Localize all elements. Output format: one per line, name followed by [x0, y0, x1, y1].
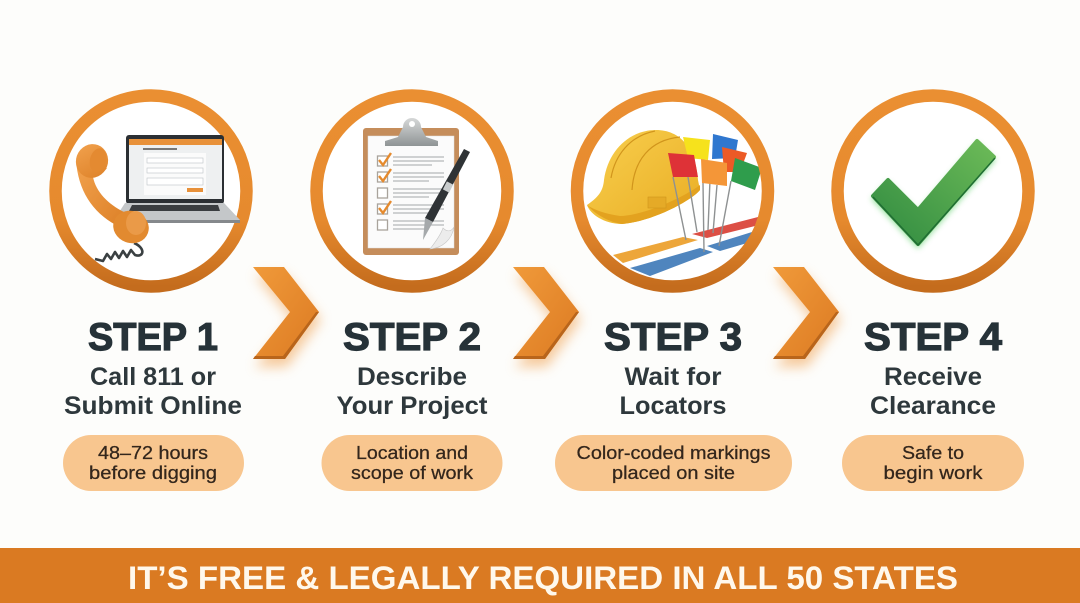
callout: step 2 note: Location and	[356, 443, 468, 463]
footer banner: IT’S FREE & LEGALLY REQUIRED IN ALL 50 STATES	[128, 560, 958, 596]
footer banner	[0, 548, 1080, 603]
text: step 2 title: Your Project	[336, 392, 488, 420]
icon: clipboard in ring	[316, 96, 508, 286]
text: step 2 title: Describe	[357, 363, 467, 391]
text: step 1 title: Call 811 or	[90, 363, 216, 391]
callout: step 3 note	[555, 435, 792, 491]
icon: hard hat, flags and markings in ring	[577, 96, 768, 286]
heading: step 1: STEP 1	[88, 316, 218, 359]
callout: step 4 note: begin work	[884, 463, 984, 483]
text: step 2 title	[336, 363, 488, 420]
text: step 3 title: Wait for	[624, 363, 722, 391]
text: step 1 title	[64, 363, 242, 420]
arrow: step 1 to 2	[253, 267, 321, 367]
callout: step 3 note: placed on site	[612, 463, 735, 483]
callout: step 4 note: Safe to	[902, 443, 964, 463]
text: step 4 title: Receive	[884, 363, 982, 391]
heading: step 3: STEP 3	[604, 316, 742, 359]
callout: step 1 note	[63, 435, 244, 491]
callout: step 1 note: before digging	[89, 463, 217, 483]
panel: step 1	[56, 96, 246, 491]
arrow: step 2 to 3	[513, 267, 581, 367]
text: step 1 title: Submit Online	[64, 392, 242, 420]
text: step 4 title	[870, 363, 996, 420]
callout: step 1 note: 48–72 hours	[98, 443, 208, 463]
icon: green check mark in ring	[838, 96, 1028, 286]
panel: step 3	[555, 96, 792, 491]
callout: step 3 note: Color-coded markings	[576, 443, 770, 463]
icon: phone and laptop in ring	[56, 96, 246, 286]
heading: step 4: STEP 4	[864, 316, 1002, 359]
callout: step 2 note	[322, 435, 502, 491]
arrow: step 3 to 4	[773, 267, 841, 367]
callout: step 2 note: scope of work	[351, 463, 474, 483]
callout: step 4 note	[842, 435, 1024, 491]
text: step 3 title: Locators	[620, 392, 726, 420]
panel: step 4	[838, 96, 1028, 491]
text: step 3 title	[620, 363, 726, 420]
text: step 4 title: Clearance	[870, 392, 996, 420]
heading: step 2: STEP 2	[343, 316, 481, 359]
panel: step 2	[316, 96, 508, 491]
